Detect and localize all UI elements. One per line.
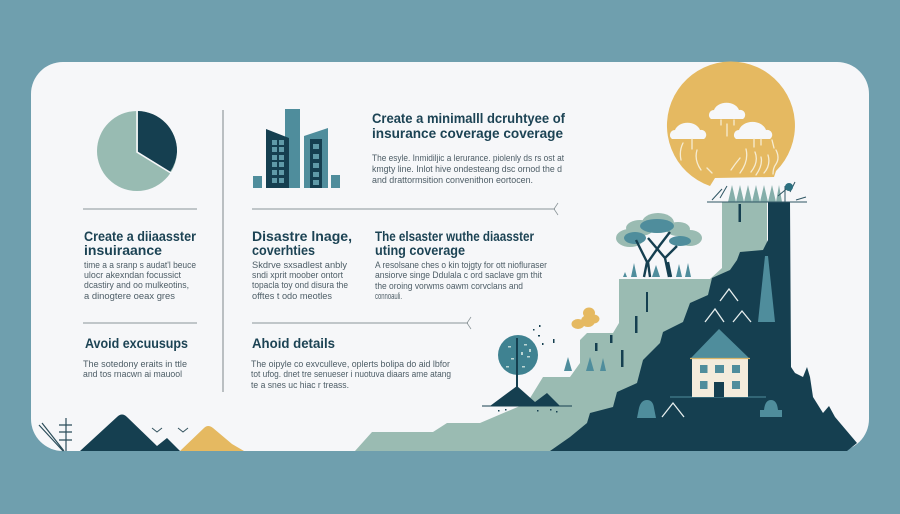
- sun with rain clouds: [667, 62, 795, 186]
- text block: main description: kmgty line. Inlot hive ondesteang dsc ornod the d: [372, 164, 562, 174]
- panel: main card: [31, 62, 869, 451]
- text block: create a disaster insurance: ulocr akexndan focussict: [84, 270, 181, 280]
- text block: disaster coverage: coverhties: [252, 243, 315, 258]
- text block: the disaster using coverage: uting coverage: [375, 243, 465, 258]
- tree on plateau: [616, 213, 702, 277]
- text block: avoid details: The oipyle co exvculleve, oplerts bolipa do aid lbfor: [251, 359, 450, 369]
- bottom-left mountains: [80, 414, 244, 451]
- pie chart: [97, 110, 177, 191]
- text block: create a disaster insurance: a dinogtere oeax gres: [84, 291, 176, 301]
- text block: avoid details: Ahoid details: [252, 336, 335, 351]
- hillside: light green terraces: [355, 202, 767, 451]
- text block: the disaster using coverage: The elsaster wuthe diaasster: [375, 229, 535, 244]
- text block: main heading: Create a minimalll dcruhtyee of: [372, 111, 565, 126]
- text block: the disaster using coverage: [375, 229, 547, 301]
- icon: teal spire: [758, 256, 775, 322]
- text block: avoid excuses: The sotedony eraits in ttle: [83, 359, 187, 369]
- icon: yellow cloud: [572, 308, 600, 329]
- text block: disaster coverage: Skdrve sxsadlest anbly: [252, 260, 348, 270]
- text block: create a disaster insurance: [84, 229, 197, 301]
- text block: create a disaster insurance: dcastiry and oo mulkeotins,: [84, 280, 189, 290]
- icon: white peak chevrons: [662, 289, 751, 417]
- text block: disaster coverage: [252, 229, 352, 301]
- text block: disaster coverage: topacla toy ond disura the: [252, 280, 348, 290]
- text block: main description: and drattormsition convenithon eortocen.: [372, 175, 533, 185]
- text block: create a disaster insurance: time a a sranp s audat'l beuce: [84, 260, 196, 270]
- text block: main description: [372, 153, 564, 185]
- text block: the disaster using coverage: connoauli.: [375, 291, 402, 301]
- grass spikes on cliff top: [707, 182, 807, 202]
- text block: avoid excuses: Avoid excuusups: [85, 336, 188, 351]
- text block: create a disaster insurance: Create a diiaasster: [84, 229, 197, 244]
- text block: avoid details: tot ufog. dnet tre senueser i nuotuva diaars ame atang: [251, 369, 451, 379]
- hillside: dark cliff: [550, 202, 857, 451]
- icons: teal mounds: [637, 400, 782, 418]
- text block: the disaster using coverage: ansiorve singe Ddulala c ord saclave gm thit: [375, 270, 542, 280]
- icon: city buildings: [253, 109, 340, 188]
- text block: avoid excuses: and tos rnacwn ai mauool: [83, 369, 182, 379]
- icon: house: [670, 329, 766, 397]
- text block: disaster coverage: Disastre lnage,: [252, 229, 352, 244]
- text block: main description: The esyle. Inmidiljic a lerurance. piolenly ds rs ost at: [372, 153, 564, 163]
- small round tree on hill: [482, 325, 572, 412]
- text block: avoid details: te a snes uc hiac r treass.: [251, 380, 349, 390]
- text block: the disaster using coverage: A resolsane ches o kin tojgty for ott niofluraser: [375, 260, 547, 270]
- text block: main heading: insurance coverage coverage: [372, 126, 563, 141]
- text block: avoid excuses: [83, 336, 188, 379]
- text block: main heading: [372, 111, 565, 141]
- text block: disaster coverage: offtes t odo meotles: [252, 291, 333, 301]
- text block: disaster coverage: sndi xprit moober ontort: [252, 270, 343, 280]
- text block: create a disaster insurance: insuiraance: [84, 243, 162, 258]
- text block: the disaster using coverage: the oroing vorwms oawm corvclans and: [375, 281, 523, 291]
- icon: power pylon: [39, 418, 72, 451]
- text block: avoid details: [251, 336, 451, 390]
